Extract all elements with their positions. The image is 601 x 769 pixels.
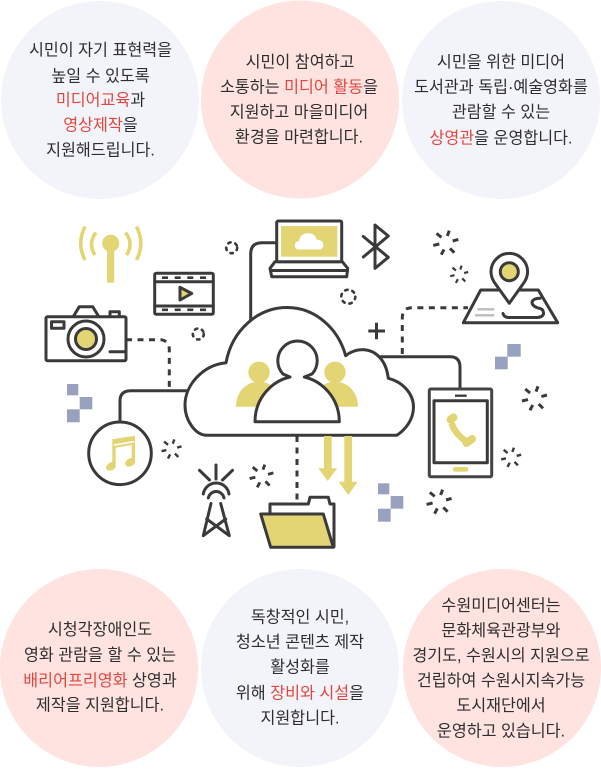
- center user: [255, 341, 339, 422]
- panel text: 위해 장비와 시설을: [236, 684, 364, 702]
- icon: laptop: [270, 221, 348, 277]
- icon: map pin: [463, 253, 558, 323]
- connectors: [120, 243, 468, 503]
- icon: signal antenna: [81, 226, 141, 283]
- cloud outline: [185, 308, 414, 435]
- panel text: 수원미디어센터는: [441, 597, 561, 615]
- panel text: 영상제작을: [63, 116, 138, 134]
- side user right: [312, 362, 358, 407]
- decoration: blue squares lower: [378, 483, 403, 522]
- panel text: 미디어교육과: [56, 92, 145, 110]
- panel text: 도서관과 독립·예술영화를: [414, 78, 588, 96]
- circle background: [1, 1, 199, 199]
- panel text: 경기도, 수원시의 지원으로: [412, 647, 590, 665]
- panel text: 청소년 콘텐츠 제작: [236, 634, 364, 652]
- panel text: 소통하는 미디어 활동을: [220, 78, 378, 96]
- circle background: [0, 569, 198, 767]
- icon: plus: [368, 323, 385, 339]
- panel text: 지원해드립니다.: [46, 142, 155, 160]
- panel text: 배리어프리영화 상영과: [23, 672, 177, 690]
- panel text: 활성화를: [270, 658, 330, 676]
- panel text: 관람할 수 있는: [452, 104, 550, 122]
- side user left: [236, 362, 282, 407]
- panel: media education: [1, 1, 199, 199]
- panel text: 시청각장애인도: [48, 621, 152, 639]
- panel: media activity: [201, 0, 399, 198]
- diagram: central cloud with users: [185, 308, 414, 435]
- icon: bluetooth: [363, 225, 388, 268]
- decoration: sparkles: [162, 231, 547, 514]
- panel text: 지원합니다.: [261, 710, 339, 728]
- icon: broadcast tower: [200, 465, 232, 536]
- panel text: 건립하여 수원시지속가능: [417, 672, 585, 690]
- circle background: [403, 569, 601, 767]
- panel text: 환경을 마련합니다.: [235, 128, 363, 146]
- icon: film strip: [155, 273, 213, 314]
- panel text: 시민을 위한 미디어: [437, 54, 565, 72]
- panel text: 지원하고 마을미디어: [230, 104, 368, 122]
- icon: folder: [261, 497, 334, 547]
- panel text: 운영하고 있습니다.: [437, 722, 565, 740]
- panel text: 영화 관람을 할 수 있는: [24, 646, 176, 664]
- panel text: 높일 수 있도록: [51, 68, 150, 86]
- decoration: blue squares upper right: [495, 344, 521, 369]
- panel text: 시민이 참여하고: [246, 54, 354, 72]
- panel: about the center: [403, 569, 601, 767]
- panel text: 독창적인 시민,: [251, 608, 349, 626]
- panel: screening hall: [402, 1, 600, 199]
- panel text: 제작을 지원합니다.: [36, 696, 164, 714]
- circle background: [201, 569, 399, 767]
- panel text: 도시재단에서: [456, 697, 546, 715]
- decoration: blue squares left: [67, 384, 92, 422]
- icon: music note: [89, 422, 151, 485]
- panel: barrier free: [0, 569, 198, 767]
- panel text: 시민이 자기 표현력을: [29, 42, 172, 60]
- arrows: download: [318, 436, 358, 495]
- panel text: 상영관을 운영합니다.: [429, 130, 573, 148]
- circle background: [201, 0, 399, 198]
- circle background: [402, 1, 600, 199]
- panel: equipment and facilities: [201, 569, 399, 767]
- panel text: 문화체육관광부와: [441, 622, 561, 640]
- icon: phone: [429, 389, 492, 477]
- icon: camera: [46, 307, 126, 361]
